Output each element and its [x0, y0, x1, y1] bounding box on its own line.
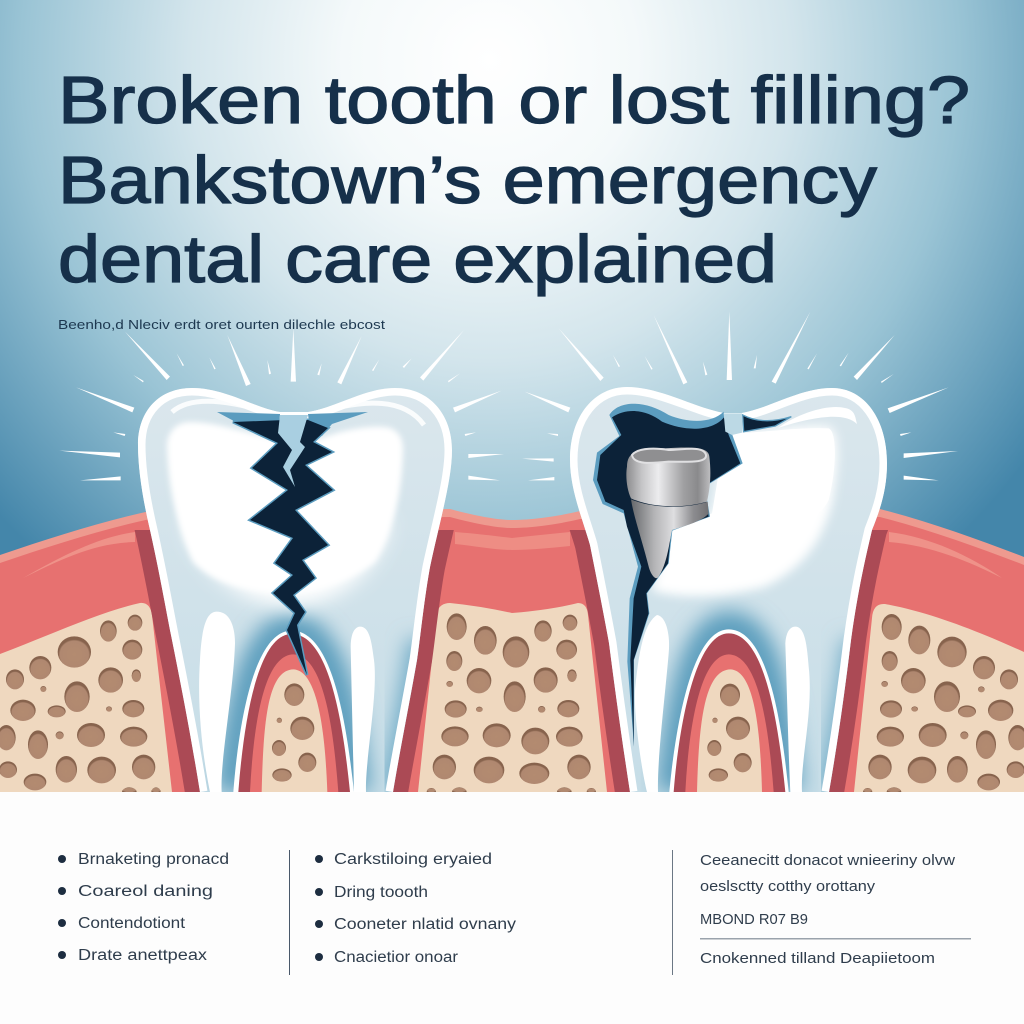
post top opening [632, 449, 706, 463]
rays around filling tooth [522, 312, 958, 480]
light wedge at fissure [724, 413, 742, 435]
rays around broken tooth [59, 328, 504, 480]
title: Bankstown’s emergency [58, 143, 878, 218]
white footer panel [0, 792, 1024, 1024]
footer column 1 list: Contendotiont [78, 915, 186, 932]
cavity blue edge [593, 404, 743, 747]
background gradient [0, 0, 1024, 792]
cavity with metal post [593, 404, 791, 747]
crown highlight [778, 407, 857, 428]
tooth body [138, 388, 452, 792]
furcation gum and bone [669, 629, 789, 792]
footer column 3 text: MBOND R07 B9 [700, 911, 808, 928]
crack [217, 412, 368, 675]
metal post upper [626, 448, 710, 506]
footer column 1 list: Coareol daning [78, 883, 213, 900]
footer column 3 text: Ceeanecitt donacot wnieeriny olvw [700, 852, 955, 869]
title: dental care explained [58, 222, 777, 297]
filling tooth [570, 387, 887, 792]
gums [0, 509, 1024, 792]
bone pores right [863, 614, 1024, 792]
footer column 3 text: Cnokenned tilland Deapiietoom [700, 950, 935, 967]
footer column 3 text [700, 852, 971, 967]
divider 1 [289, 850, 290, 975]
cavity dark [597, 411, 740, 747]
footer column 3 text: oeslsctty cotthy orottany [700, 878, 876, 895]
bone pores left [0, 615, 161, 792]
tooth body [570, 387, 887, 792]
subtitle: Beenho,d Nleciv erdt oret ourten dilechle ebcost [58, 318, 386, 332]
bone middle [418, 603, 607, 792]
title: Broken tooth or lost filling? [58, 63, 970, 138]
footer column 2 list: Cnacietior onoar [334, 949, 458, 966]
footer column 1 list [58, 851, 229, 964]
footer column 1 list: Brnaketing pronacd [78, 851, 229, 868]
footer column 1 list: Drate anettpeax [78, 947, 207, 964]
bone pores middle [427, 613, 596, 792]
metal post lower [631, 499, 709, 578]
title [58, 63, 970, 297]
soft shading [138, 388, 452, 792]
right crown gap [743, 415, 791, 432]
broken tooth [138, 388, 452, 792]
root highlights [199, 612, 375, 792]
footer column 2 list: Cooneter nlatid ovnany [334, 916, 516, 933]
soft shading [570, 387, 887, 792]
root highlights [635, 615, 810, 792]
footer column 2 list: Carkstiloing eryaied [334, 851, 492, 868]
divider 2 [672, 850, 673, 975]
footer column 2 list [315, 851, 516, 966]
furcation gum and bone [233, 631, 354, 792]
dark gum band around teeth [134, 530, 888, 792]
footer column 2 list: Dring toooth [334, 884, 428, 901]
bone left [0, 603, 172, 792]
bone right [854, 604, 1024, 792]
